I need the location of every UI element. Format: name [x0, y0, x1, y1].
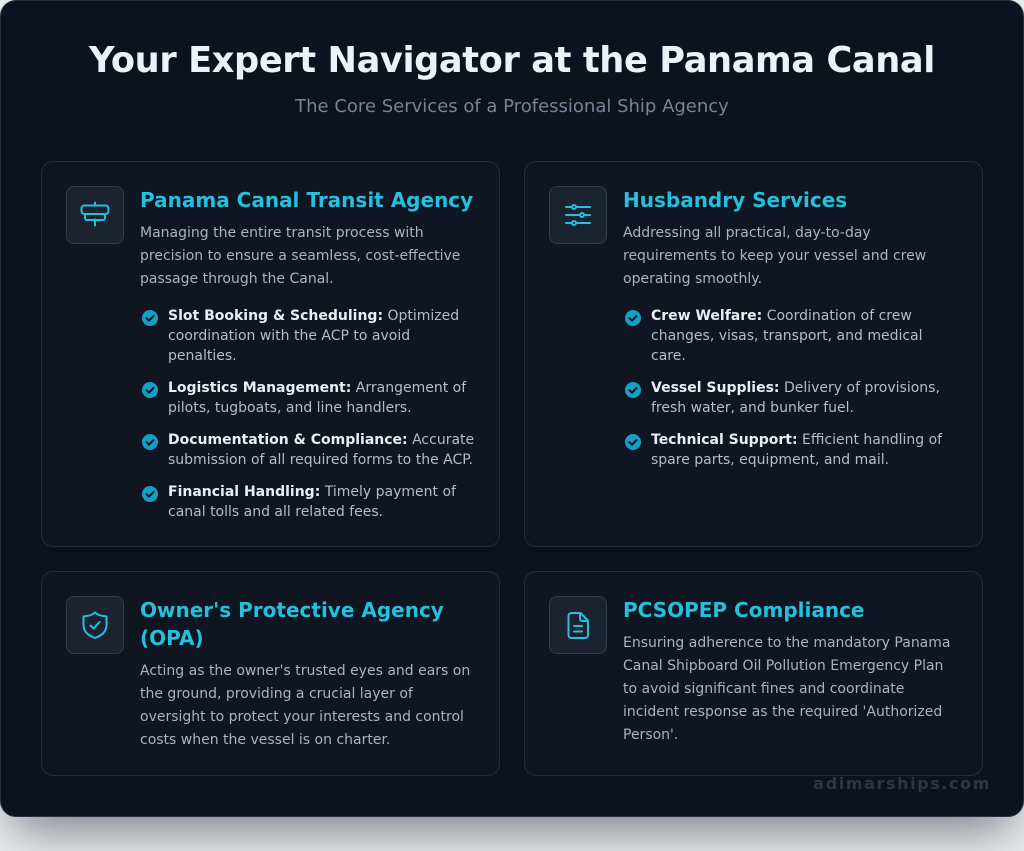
- list item: financial: canal tolls and all related fees.: [168, 504, 383, 520]
- list item: logistics: [142, 380, 466, 416]
- watermark: adimarships.com: [813, 774, 991, 793]
- panel: Panama Canal Transit Agency: [41, 161, 500, 547]
- description: precision to ensure a seamless, cost-effective: [140, 248, 460, 264]
- description: Addressing all practical, day-to-day: [623, 225, 871, 241]
- description: Acting as the owner's trusted eyes and ears on: [140, 663, 470, 679]
- list item: crew welfare: [625, 308, 923, 364]
- list item: slot booking: Slot Booking & Scheduling: Optimized: [168, 308, 459, 324]
- heading: [140, 598, 444, 650]
- list item: vessel supplies: fresh water, and bunker fuel.: [651, 400, 854, 416]
- description: passage through the Canal.: [140, 271, 334, 287]
- description: oversight to protect your interests and control: [140, 709, 464, 725]
- icon: document: [549, 596, 607, 654]
- list item: vessel supplies: [625, 380, 940, 416]
- list item: documentation: Documentation & Compliance: Accurate: [168, 432, 474, 448]
- icon: shield check: [66, 596, 124, 654]
- list item: slot booking: coordination with the ACP to avoid: [168, 328, 410, 344]
- panel: Owner's Protective Agency: [41, 571, 500, 776]
- description: Managing the entire transit process with: [140, 225, 424, 241]
- heading: Panama Canal Transit Agency: [140, 188, 473, 212]
- heading: (OPA): [140, 626, 204, 650]
- panel: Husbandry Services: [524, 161, 983, 547]
- heading: Owner's Protective Agency: [140, 598, 444, 622]
- description: requirements to keep your vessel and crew: [623, 248, 926, 264]
- icon: sliders: [549, 186, 607, 244]
- description: [623, 225, 926, 287]
- list item: crew welfare: changes, visas, transport, and medical: [651, 328, 923, 344]
- description: Canal Shipboard Oil Pollution Emergency Plan: [623, 658, 943, 674]
- list item: crew welfare: care.: [651, 348, 686, 364]
- description: [140, 663, 470, 748]
- heading: Husbandry Services: [623, 188, 847, 212]
- heading: PCSOPEP Compliance: [623, 598, 864, 622]
- list item: financial: [142, 484, 456, 520]
- description: costs when the vessel is on charter.: [140, 732, 390, 748]
- list item: vessel supplies: Vessel Supplies: Delivery of provisions,: [651, 380, 940, 396]
- panel: PCSOPEP Compliance: [524, 571, 983, 776]
- list item: documentation: submission of all required forms to the ACP.: [168, 452, 473, 468]
- title: Your Expert Navigator at the Panama Canal: [89, 40, 935, 81]
- list item: logistics: Logistics Management: Arrangement of: [168, 380, 466, 396]
- description: operating smoothly.: [623, 271, 762, 287]
- description: [623, 635, 950, 743]
- list item: slot booking: [142, 308, 459, 364]
- description: incident response as the required 'Authorized: [623, 704, 942, 720]
- list item: slot booking: penalties.: [168, 348, 237, 364]
- subtitle: The Core Services of a Professional Ship Agency: [295, 96, 729, 117]
- description: Person'.: [623, 727, 678, 743]
- list item: crew welfare: Crew Welfare: Coordination of crew: [651, 308, 912, 324]
- description: Ensuring adherence to the mandatory Panama: [623, 635, 950, 651]
- icon: signpost: [66, 186, 124, 244]
- list item: logistics: pilots, tugboats, and line handlers.: [168, 400, 412, 416]
- description: to avoid significant fines and coordinate: [623, 681, 904, 697]
- description: [140, 225, 460, 287]
- list item: technical support: spare parts, equipment, and mail.: [651, 452, 889, 468]
- list item: documentation: [142, 432, 474, 468]
- list item: technical support: Technical Support: Efficient handling of: [651, 432, 942, 448]
- list item: technical support: [625, 432, 942, 468]
- list item: financial: Financial Handling: Timely payment of: [168, 484, 456, 500]
- description: the ground, providing a crucial layer of: [140, 686, 413, 702]
